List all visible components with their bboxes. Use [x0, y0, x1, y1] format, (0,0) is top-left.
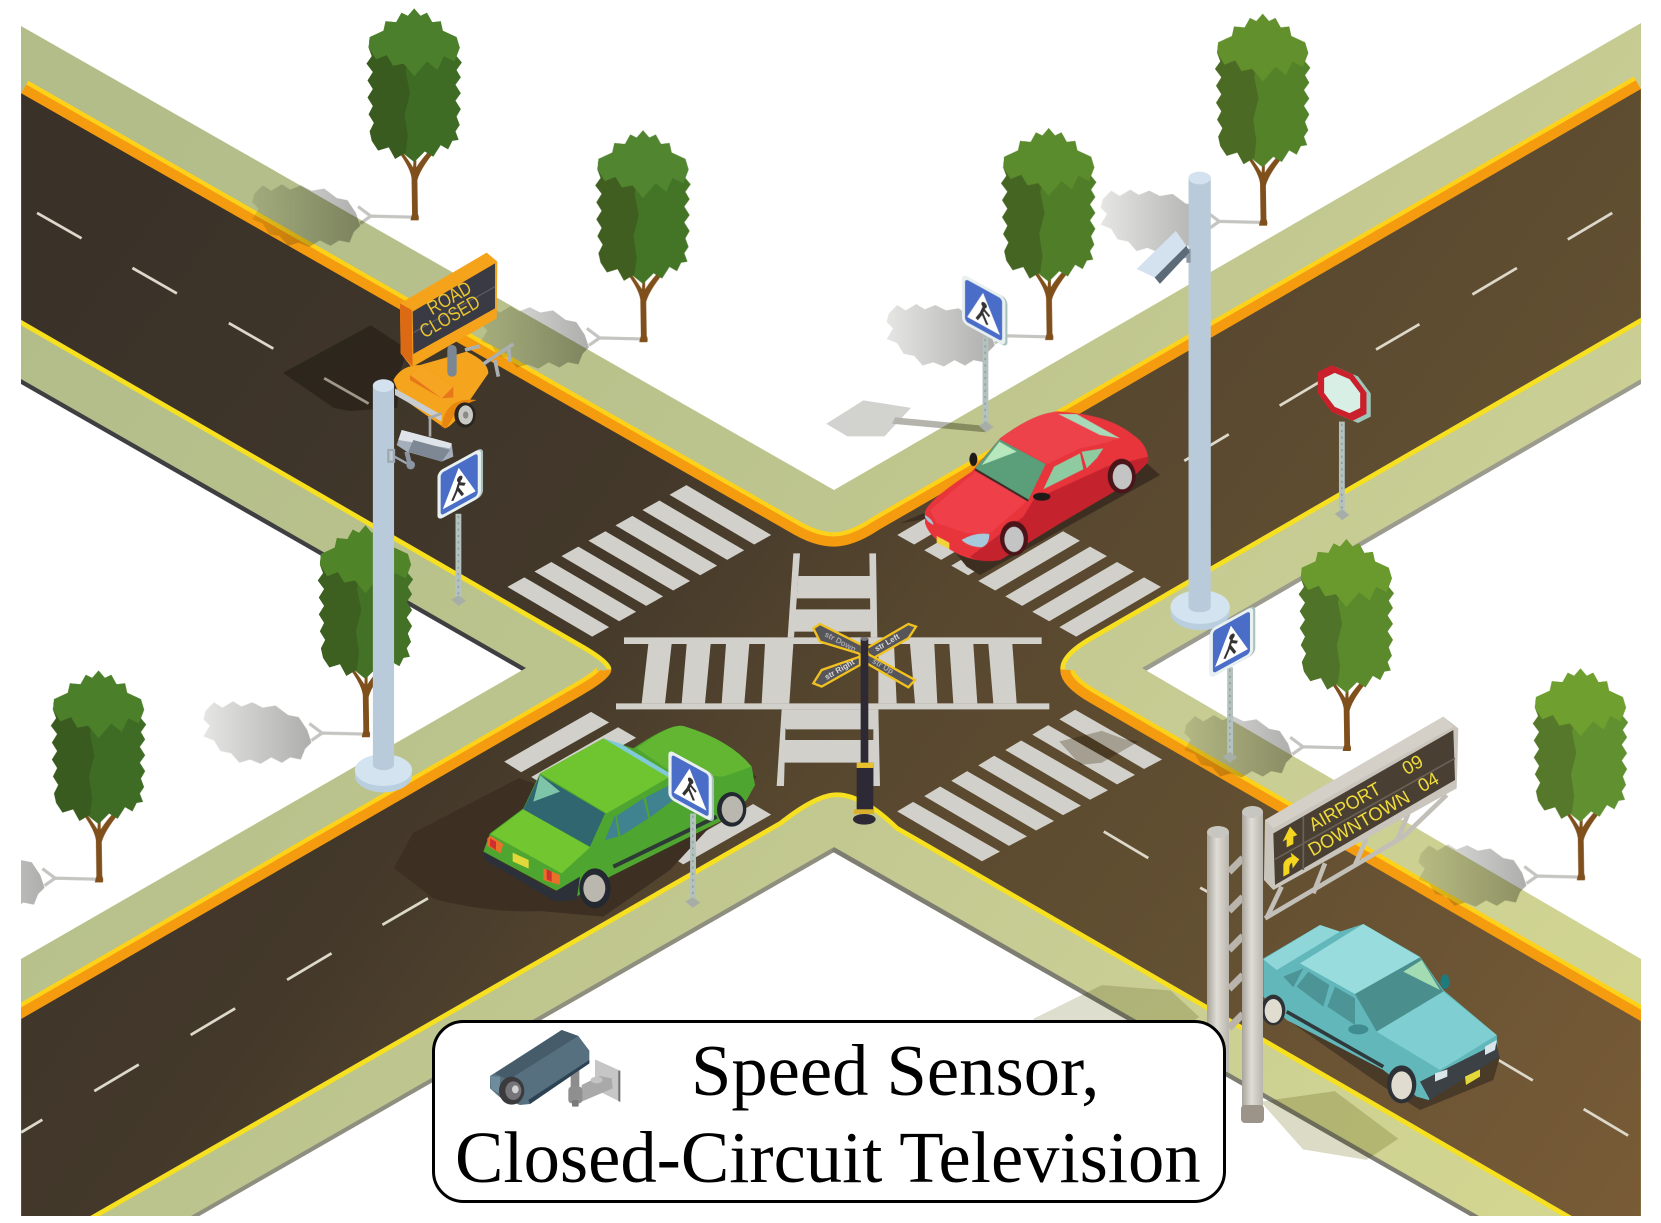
overhead direction sign: AIRPORT [1305, 778, 1384, 835]
icon: tree 3 [1001, 128, 1096, 340]
central street name signpost: str Right [823, 657, 856, 682]
car: teal [1261, 924, 1500, 1110]
road closed trailer with sign [393, 253, 513, 437]
sidewalk outer edge shading [21, 379, 1641, 1216]
surveillance camera west [388, 430, 453, 469]
post: pedestrian sign east [1222, 667, 1237, 763]
shadow: road closed trailer [283, 325, 408, 411]
message board: ROAD [424, 278, 476, 320]
icon: pedestrian crossing sign east [1210, 605, 1255, 679]
shadow: sign post [892, 417, 985, 432]
message board [400, 253, 497, 367]
camera pole with base west [355, 379, 412, 792]
icon: tree 6 [51, 671, 146, 882]
icon: CCTV camera [490, 1030, 620, 1107]
trailer body [393, 344, 513, 437]
icon: tree 8 [1533, 668, 1628, 880]
legend text line 2: Closed-Circuit Television [455, 1117, 1201, 1198]
car: red [900, 412, 1160, 575]
gantry supports [1207, 806, 1264, 1123]
shadow: gantry lower [1261, 1091, 1398, 1160]
central street name signpost: str Down [823, 630, 858, 654]
camera pole with base east [1171, 172, 1230, 630]
icon: stop sign [1318, 365, 1371, 423]
central street name signpost: str Left [873, 632, 901, 653]
shadow: red car on sidewalk [953, 482, 1030, 541]
icon: pedestrian crossing sign west [437, 447, 483, 521]
crosswalk: north-west [507, 485, 771, 637]
post: pedestrian sign west [451, 514, 466, 606]
icon: pedestrian crossing sign north [962, 274, 1007, 348]
icon: straight arrow [1283, 827, 1297, 847]
post: pedestrian sign north [979, 337, 994, 432]
surveillance camera east [1137, 231, 1190, 284]
overhead direction sign: 04 [1414, 768, 1442, 796]
icon: turn arrow [1283, 853, 1299, 877]
icon: pedestrian crossing sign south [668, 749, 714, 823]
shadow: sign on white [826, 400, 911, 436]
central street name signpost: str Up [871, 657, 895, 676]
legend text line 1: Speed Sensor, [691, 1030, 1099, 1111]
overhead direction sign: DOWNTOWN [1304, 786, 1413, 860]
crosswalk: north-east [897, 518, 1161, 637]
message board: CLOSED [416, 292, 484, 343]
shadow: gantry [1033, 985, 1199, 1033]
car: green [394, 726, 757, 917]
tree shadows [0, 184, 1579, 909]
icon: tree 5 [318, 525, 413, 737]
overhead direction sign [1264, 717, 1458, 918]
overhead direction sign: 09 [1398, 750, 1427, 779]
lane dashes [21, 213, 1628, 1136]
legend box [434, 1022, 1224, 1202]
icon: tree 2 [595, 130, 691, 342]
icon: tree 4 [1215, 14, 1310, 226]
center crosswalk ladder markings [616, 553, 1049, 786]
post: stop sign [1335, 422, 1350, 520]
crosswalk: south-east [897, 710, 1162, 861]
icon: tree 1 [367, 8, 462, 220]
central street name signpost [813, 624, 916, 825]
back pole [1207, 832, 1229, 1072]
shadow: sign on south-east crosswalk [1059, 731, 1139, 765]
post: pedestrian sign south [685, 814, 700, 908]
crosswalk: south-west [504, 712, 771, 864]
front pole [1242, 812, 1263, 1117]
icon: tree 7 [1299, 539, 1394, 751]
ladder rungs [1229, 858, 1243, 1028]
